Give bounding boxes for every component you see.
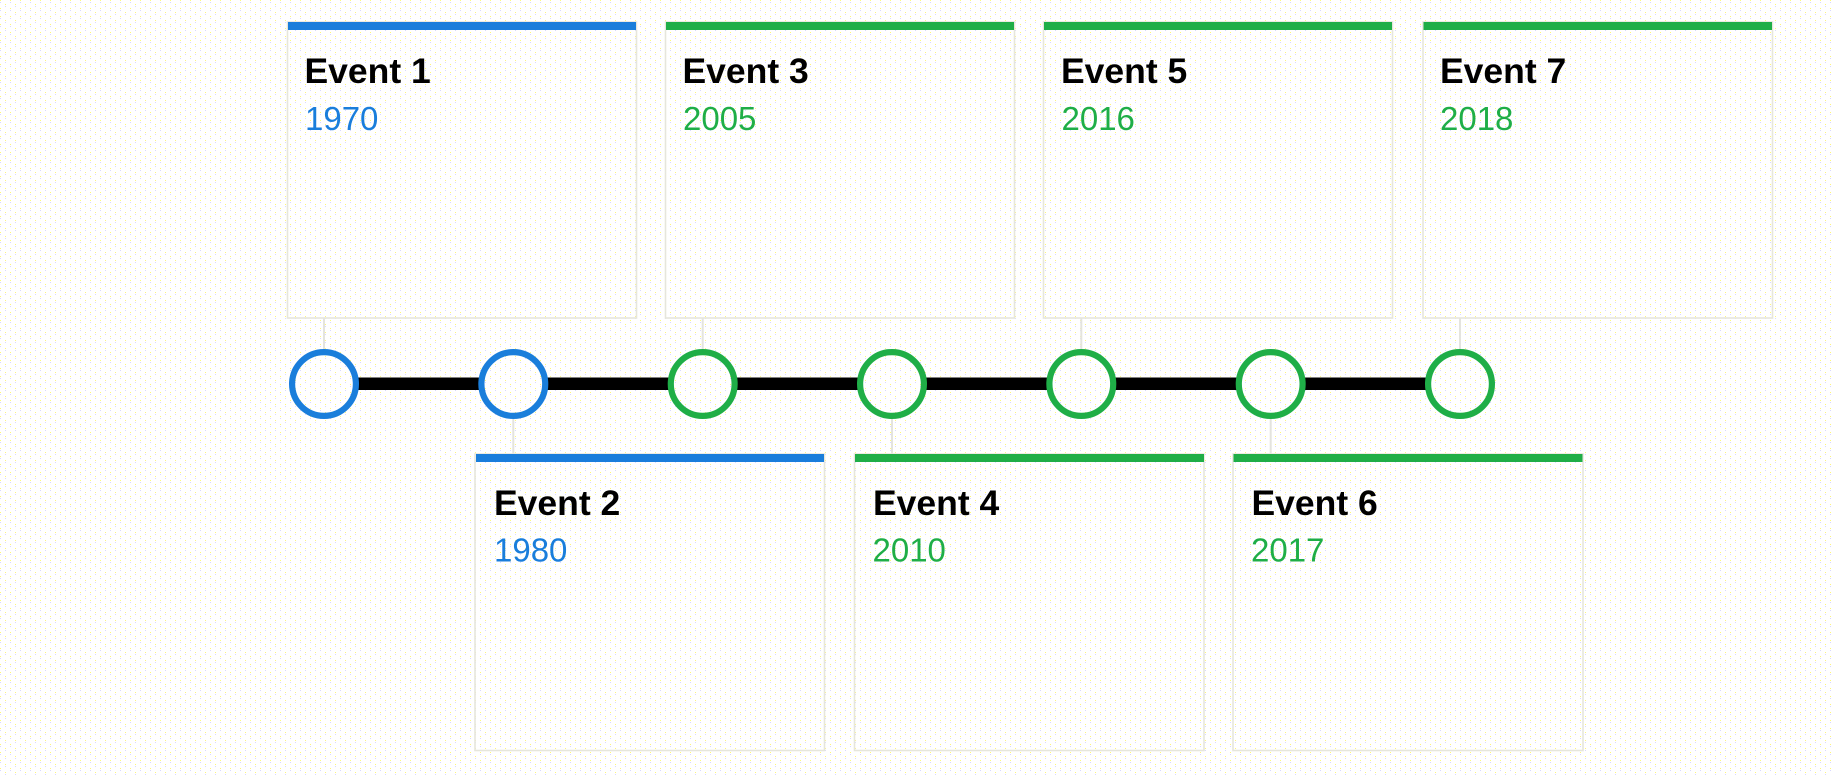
panel: event 2 bbox=[475, 454, 824, 750]
year: event 2: 1980 bbox=[494, 532, 567, 569]
connector: event 7 bbox=[1459, 318, 1461, 350]
panel: event 1 bbox=[288, 22, 636, 318]
heading: event 5: Event 5 bbox=[1061, 51, 1187, 91]
heading: event 7: Event 7 bbox=[1440, 51, 1566, 91]
connector: event 1 bbox=[323, 318, 325, 350]
panel: event 7 bbox=[1423, 22, 1772, 318]
panel: event 3 bbox=[666, 22, 1014, 318]
heading: event 4: Event 4 bbox=[873, 483, 1000, 523]
heading: event 6: Event 6 bbox=[1252, 483, 1378, 523]
connector: event 4 bbox=[891, 419, 893, 454]
connector: event 2 bbox=[512, 419, 514, 454]
heading: event 3: Event 3 bbox=[682, 51, 809, 91]
marker: event 6 bbox=[1239, 352, 1303, 416]
timeline axis bbox=[324, 378, 1460, 390]
year: event 5: 2016 bbox=[1062, 100, 1135, 137]
year: event 7: 2018 bbox=[1440, 100, 1513, 137]
panel: event 5 bbox=[1044, 22, 1392, 318]
year: event 6: 2017 bbox=[1251, 532, 1324, 569]
connector: event 3 bbox=[702, 318, 704, 350]
year: event 4: 2010 bbox=[872, 532, 946, 569]
connector: event 6 bbox=[1270, 419, 1272, 454]
panel: event 6 bbox=[1233, 454, 1583, 750]
marker: event 2 bbox=[481, 352, 545, 416]
marker: event 3 bbox=[671, 352, 735, 416]
marker: event 1 bbox=[292, 352, 356, 416]
heading: event 1: Event 1 bbox=[304, 51, 431, 91]
marker: event 7 bbox=[1428, 352, 1492, 416]
heading: event 2: Event 2 bbox=[494, 483, 620, 523]
marker: event 5 bbox=[1049, 352, 1113, 416]
year: event 1: 1970 bbox=[305, 100, 378, 137]
panel: event 4 bbox=[854, 454, 1204, 750]
year: event 3: 2005 bbox=[683, 100, 756, 137]
marker: event 4 bbox=[860, 352, 924, 416]
connector: event 5 bbox=[1080, 318, 1082, 350]
